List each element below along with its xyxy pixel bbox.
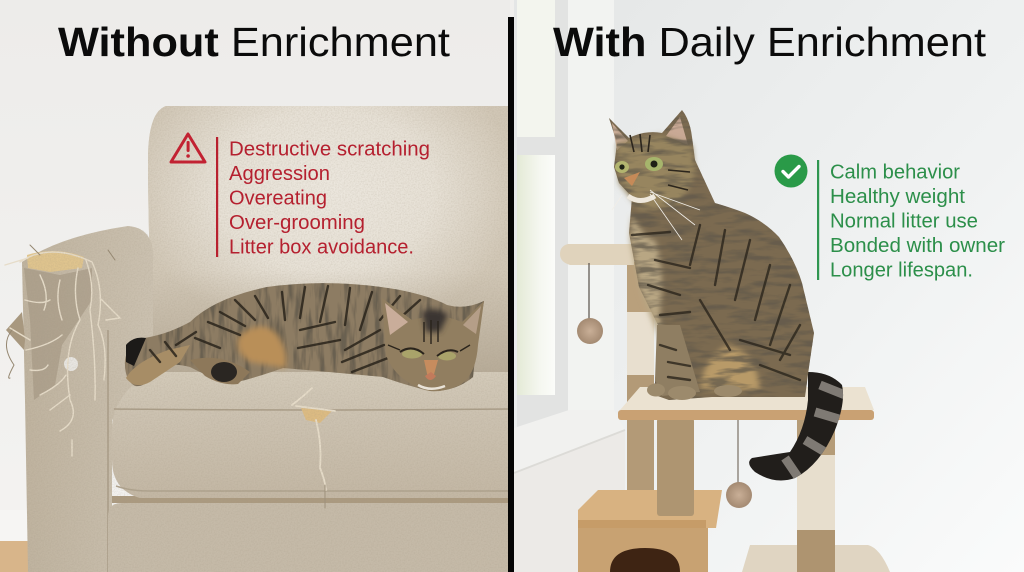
panel: with daily enrichment — [514, 0, 1024, 572]
fur streaks — [605, 105, 820, 405]
wooden box — [578, 490, 722, 572]
paws — [647, 384, 742, 400]
list: benefits: Healthy weight — [830, 186, 965, 208]
cat: sitting tabby — [605, 105, 850, 485]
cat head — [382, 298, 484, 391]
legs — [655, 325, 700, 396]
shredded arm damage — [5, 245, 120, 456]
back cushion — [148, 106, 508, 372]
torn seat seam — [292, 388, 335, 508]
front post — [657, 418, 694, 516]
hanging toy: upper — [577, 263, 603, 344]
cat tree — [560, 244, 890, 572]
list: problems — [229, 138, 430, 258]
fabric texture — [0, 100, 510, 572]
rule: green — [817, 160, 819, 280]
list: benefits: Longer lifespan. — [830, 260, 973, 282]
list: benefits — [830, 162, 1005, 282]
sofa — [0, 100, 510, 572]
list: problems: Overeating — [229, 188, 327, 210]
main platform — [618, 387, 874, 420]
lower base — [742, 545, 890, 572]
panel: without enrichment — [0, 0, 510, 572]
list: benefits: Bonded with owner — [830, 235, 1005, 257]
top perch — [560, 244, 634, 265]
lower sofa base — [108, 503, 510, 572]
right post — [797, 418, 835, 572]
floor and baseboard — [0, 510, 30, 572]
list: benefits: Calm behavior — [830, 162, 960, 184]
cat tail — [749, 372, 844, 480]
cat: lying tabby — [120, 280, 490, 395]
seat cushion — [112, 372, 510, 498]
divider — [508, 17, 514, 572]
belly patch — [238, 326, 286, 368]
rear post — [627, 262, 654, 497]
head lighter — [617, 135, 695, 210]
rule: red — [216, 137, 218, 257]
ear insides — [612, 123, 628, 150]
heading: with daily enrichment: With Daily Enrichment — [553, 19, 987, 65]
list: problems: Destructive scratching — [229, 138, 430, 160]
window — [514, 0, 625, 572]
cat face — [612, 134, 700, 240]
fur stripes — [632, 225, 800, 380]
stripes — [150, 286, 420, 372]
heading: without enrichment: Without Enrichment — [58, 19, 451, 65]
check icon — [774, 154, 808, 188]
hanging toy: lower — [726, 420, 752, 508]
list: problems: Over-grooming — [229, 212, 365, 234]
fur streaks — [120, 280, 490, 395]
cat body — [609, 110, 814, 400]
warning icon — [171, 134, 205, 162]
hind leg — [126, 338, 146, 366]
window sill — [514, 410, 625, 473]
chest — [630, 215, 662, 345]
list: problems: Aggression — [229, 163, 330, 185]
list: problems: Litter box avoidance. — [229, 236, 414, 258]
sofa arm — [22, 226, 153, 572]
list: benefits: Normal litter use — [830, 210, 978, 232]
